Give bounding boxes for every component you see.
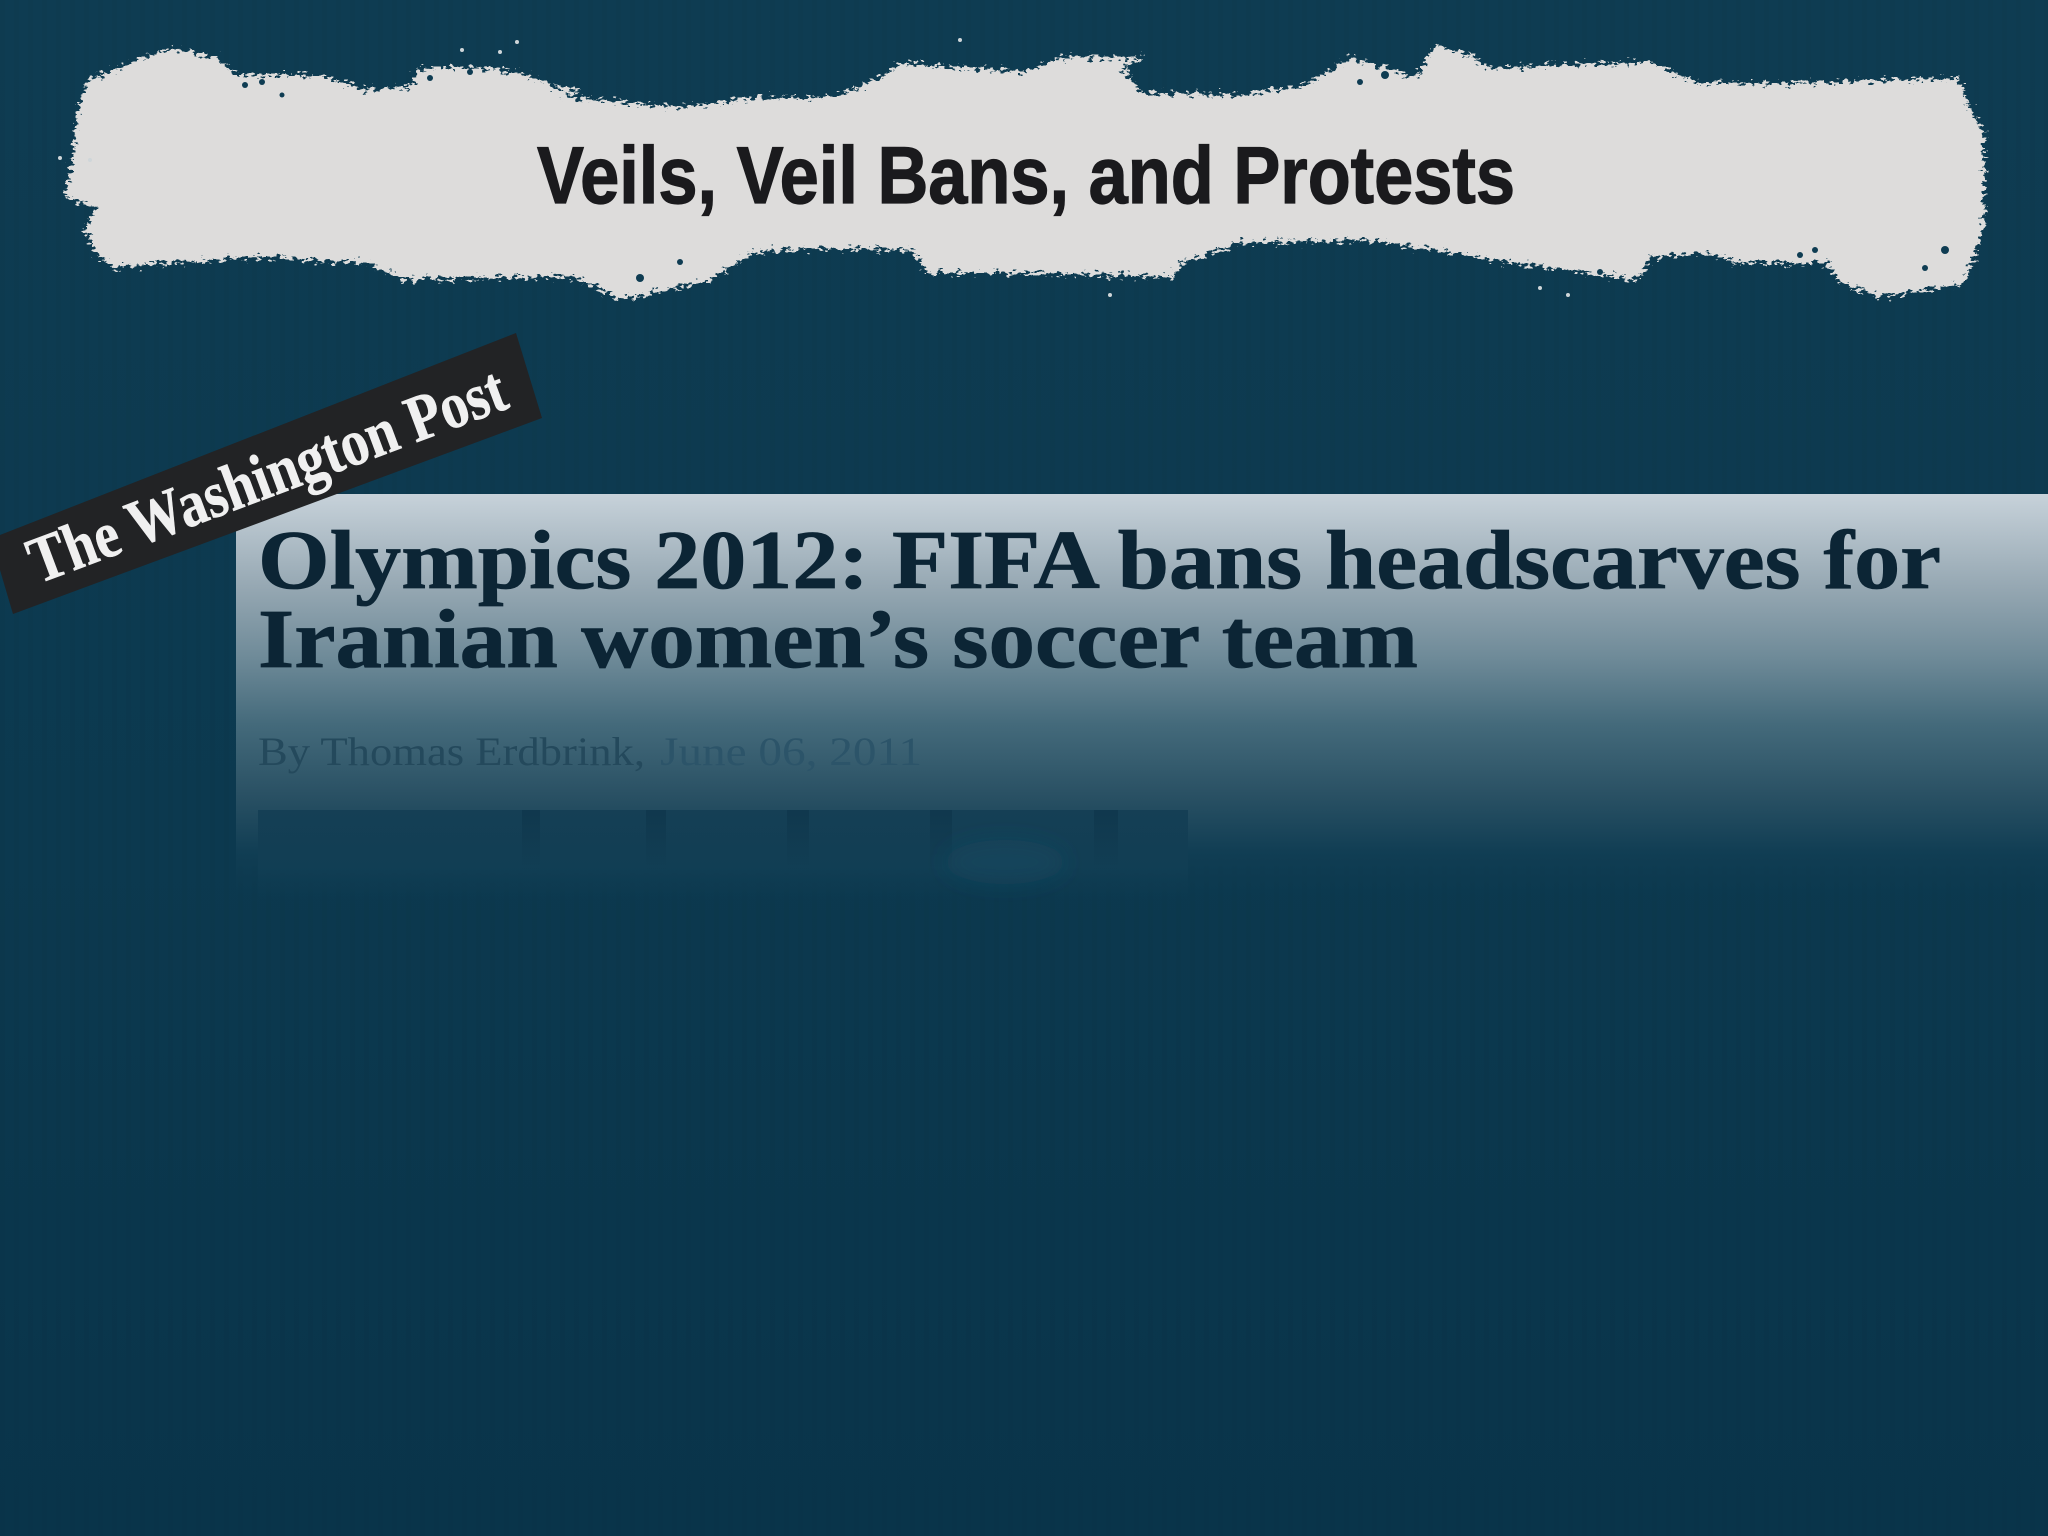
date: June 06, 2011	[660, 729, 922, 774]
label ribbon	[0, 333, 542, 614]
brush specks	[242, 69, 1949, 282]
brush stroke shape	[65, 45, 1984, 300]
article headline	[258, 514, 1941, 686]
fading page background	[236, 494, 2048, 905]
The Washington Post label	[0, 333, 542, 614]
article screenshot panel	[236, 494, 2048, 905]
byline: By Thomas Erdbrink,	[258, 729, 645, 774]
article headline: Olympics 2012: FIFA bans headscarves for	[258, 514, 1941, 607]
torn paper title banner	[58, 38, 1984, 300]
article headline: Iranian women’s soccer team	[258, 593, 1418, 686]
newspaper name: The Washington Post	[18, 353, 516, 598]
title: Veils, Veil Bans, and Protests	[537, 131, 1515, 221]
faded article photo	[258, 810, 1188, 905]
